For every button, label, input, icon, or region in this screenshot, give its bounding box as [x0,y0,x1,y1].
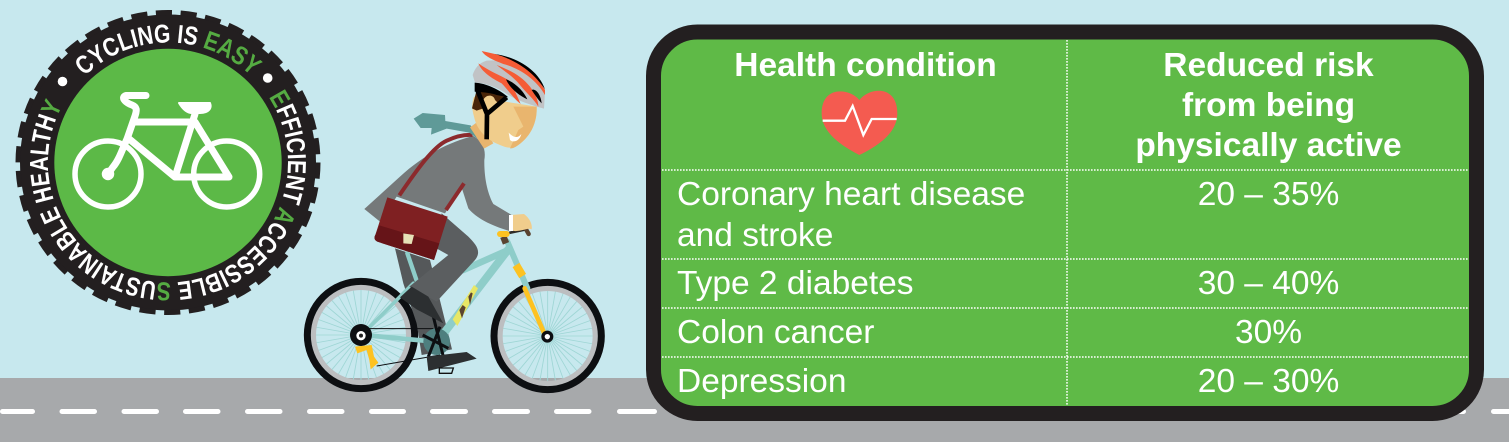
row: depression [677,363,1339,400]
row: depression: 20 – 30% [1198,363,1339,400]
heading: health condition: Health condition [734,47,997,84]
neck [470,120,493,149]
icon: white bicycle [75,96,260,207]
heading: reduced risk: from being [1182,87,1355,124]
row: colon cancer [677,314,1302,351]
row: colon cancer: Colon cancer [677,314,874,351]
heading: reduced risk: physically active [1135,127,1402,164]
road [0,378,1509,442]
row: coronary heart disease: Coronary heart disease [677,176,1025,213]
bicycle frame [363,229,546,342]
front leg [409,213,478,302]
rear shoe [427,352,477,373]
helmet [473,51,545,109]
jacket [364,136,512,231]
row: type 2 diabetes: 30 – 40% [1198,265,1339,302]
chain and crank [365,317,450,366]
cyclist on bicycle [307,51,601,390]
row: depression: Depression [677,363,846,400]
row: type 2 diabetes [677,265,1339,302]
messenger bag [374,197,448,260]
rear hub and derailleur [350,324,378,369]
shirt cuff [509,215,513,231]
badge text: cycling is easy: CYCLING IS EASY [76,24,263,73]
row: type 2 diabetes: Type 2 diabetes [677,265,914,302]
heading: reduced risk: Reduced risk [1163,47,1374,84]
badge: cycling is easy tyre [16,10,320,315]
head [472,90,537,148]
scarf [414,113,484,148]
front wheel [494,282,601,390]
bag strap [399,135,473,210]
front hub [541,331,553,343]
panel: health table [654,32,1476,414]
down tube stripes [453,285,478,326]
row: coronary heart disease: and stroke [677,217,833,254]
badge separator dots [58,73,273,86]
table grid lines [662,40,1469,406]
rear wheel [307,281,415,389]
rear leg [395,248,452,355]
icon: heart with pulse [822,91,897,155]
row: coronary heart disease: 20 – 35% [1198,176,1339,213]
badge text: efficient accessible sustainable healthy: EFFICIENT ACCESSIBLE SUSTAINABLE HEALTHY [30,89,306,300]
row: colon cancer: 30% [1235,314,1302,351]
hand [511,214,532,231]
front shoe [400,287,443,323]
row: coronary heart disease [677,176,1339,254]
